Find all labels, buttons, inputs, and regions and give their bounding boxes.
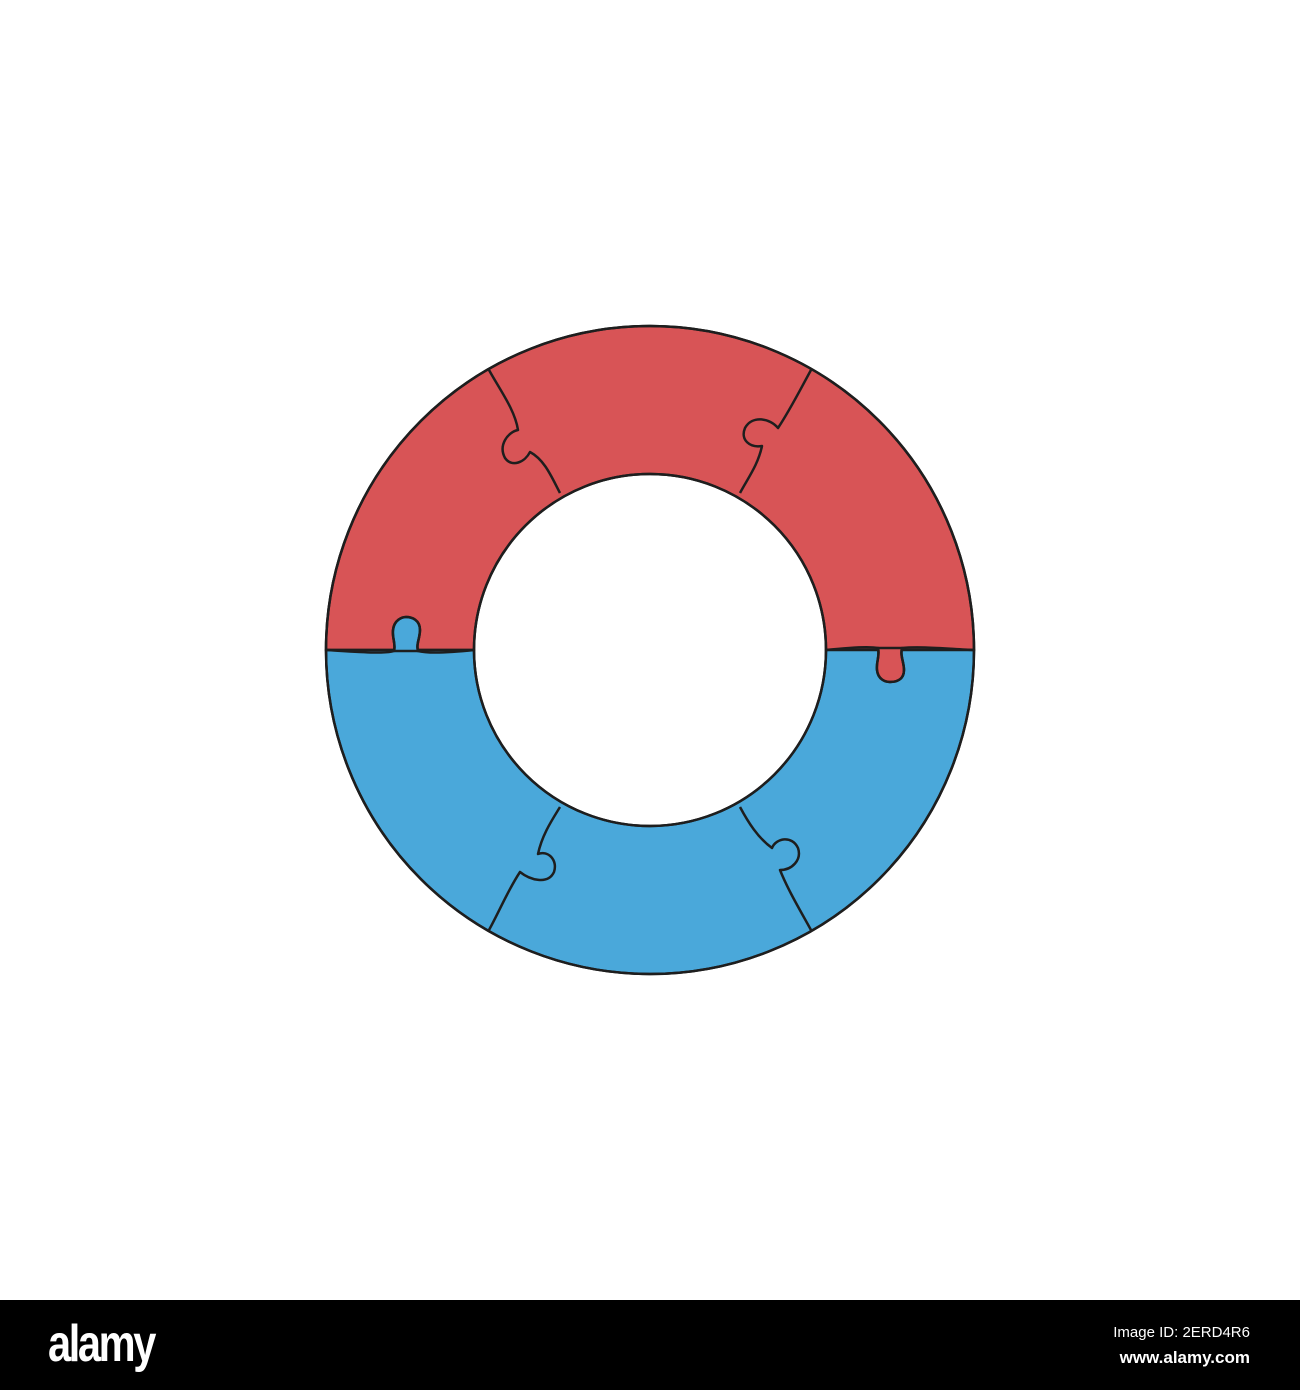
red top half xyxy=(326,326,974,650)
footer bar xyxy=(0,1300,1300,1390)
divider top-left xyxy=(489,370,560,493)
seam knob left (blue into red) xyxy=(326,617,474,653)
website: www.alamy.com xyxy=(1120,1348,1250,1367)
divider bottom-right xyxy=(740,807,811,930)
logo text: alamy xyxy=(48,1315,154,1373)
seam knob right (red into blue) xyxy=(826,647,974,682)
divider top-right xyxy=(740,370,811,493)
outer and inner outline xyxy=(326,326,974,974)
divider bottom-left xyxy=(489,807,560,930)
image id: Image ID: 2ERD4R6 xyxy=(1113,1324,1250,1341)
blue bottom half xyxy=(326,650,974,974)
